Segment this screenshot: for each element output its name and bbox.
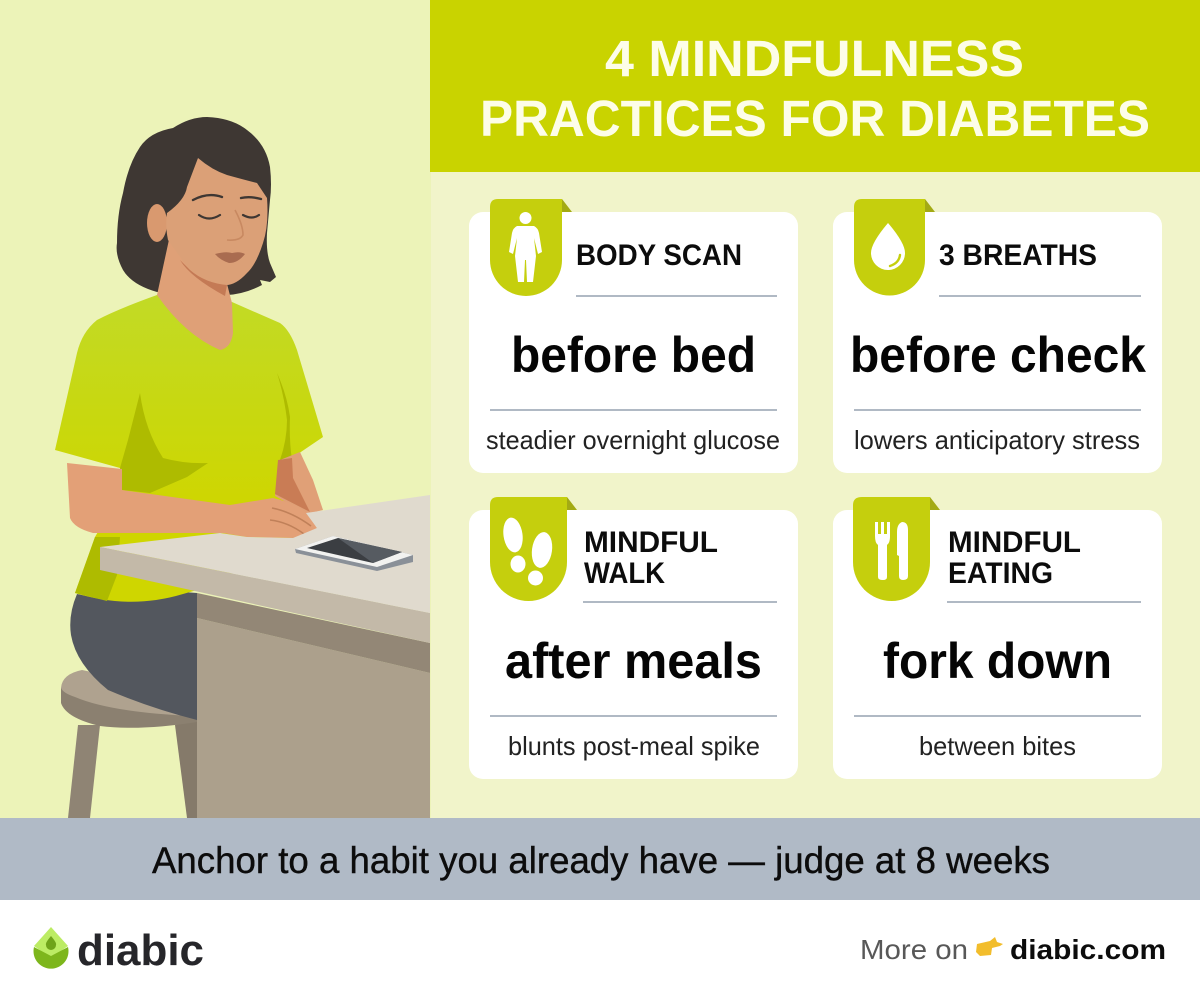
heading: EATING	[948, 557, 1053, 590]
heading: WALK	[584, 557, 665, 590]
logo: diabic	[34, 926, 204, 975]
takeaway text: Anchor to a habit you already have — judge at 8 weeks	[152, 840, 1050, 881]
heading: 3 BREATHS	[939, 239, 1097, 272]
heading: MINDFUL	[584, 526, 718, 559]
icon: footprints badge	[490, 497, 577, 601]
card: 3 breaths	[833, 199, 1162, 473]
website link: More on	[860, 934, 968, 965]
benefit: lowers anticipatory stress	[854, 425, 1140, 455]
takeaway band	[0, 818, 1200, 900]
trousers	[70, 592, 197, 720]
near arm and hand	[67, 463, 317, 538]
card: body scan	[469, 199, 798, 473]
website link: diabic.com	[1010, 934, 1166, 965]
title: 4 MINDFULNESS	[605, 30, 1024, 87]
heading: MINDFUL	[948, 526, 1081, 559]
icon: logo drop	[34, 927, 68, 969]
website link	[860, 934, 1166, 965]
icon: water drop badge	[854, 199, 935, 296]
illustration: woman seated at desk with phone	[55, 117, 430, 818]
footer	[0, 900, 1200, 1000]
icon: body badge	[490, 199, 572, 296]
neck	[157, 235, 233, 350]
title: PRACTICES FOR DIABETES	[480, 90, 1150, 147]
stool	[61, 670, 197, 818]
phone on desk	[295, 536, 413, 571]
right panel background	[431, 172, 1200, 818]
torso shirt	[55, 295, 323, 602]
heading: BODY SCAN	[576, 239, 742, 272]
wordmark: diabic	[77, 926, 204, 975]
benefit: blunts post-meal spike	[508, 731, 760, 761]
key phrase: fork down	[883, 633, 1112, 689]
face	[166, 158, 268, 296]
card: mindful walk	[469, 497, 798, 779]
ear	[147, 204, 167, 242]
heading	[948, 526, 1081, 590]
key phrase: before check	[850, 327, 1146, 383]
desk	[100, 495, 430, 818]
key phrase: after meals	[505, 633, 762, 689]
heading	[584, 526, 718, 590]
icon: fork and knife badge	[853, 497, 940, 601]
card: mindful eating	[833, 497, 1162, 779]
benefit: between bites	[919, 731, 1076, 761]
icon: pointing hand	[976, 937, 1003, 956]
hair	[117, 117, 276, 295]
benefit: steadier overnight glucose	[486, 425, 780, 455]
title	[480, 30, 1150, 147]
key phrase: before bed	[511, 327, 756, 383]
header banner	[430, 0, 1200, 172]
far arm	[275, 452, 323, 514]
left illustration background	[0, 0, 431, 818]
